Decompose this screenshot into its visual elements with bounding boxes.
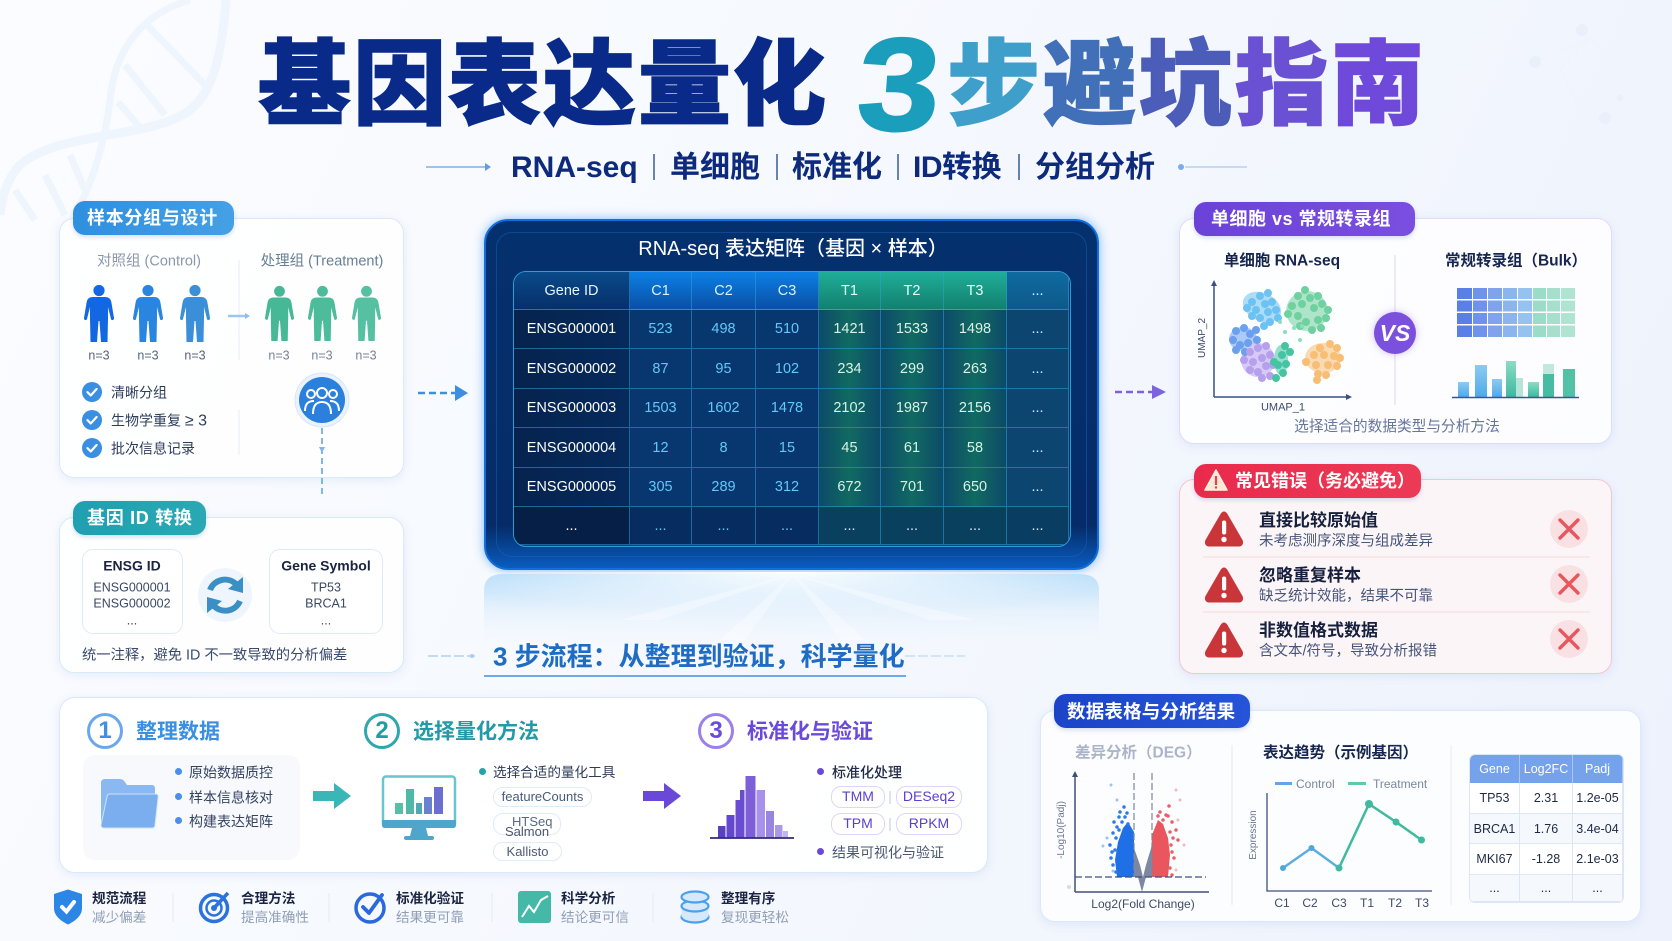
step 1 bullets: 构建表达矩阵: [189, 814, 273, 830]
expression table: 263: [963, 360, 987, 376]
step 1 bullets: 样本信息核对: [189, 789, 273, 805]
expression table: 2102: [833, 400, 866, 416]
expression table: ...: [654, 518, 667, 534]
sample count labels: n=3: [137, 348, 159, 362]
subtitle: RNA-seq: [511, 151, 638, 184]
expression table: ...: [1031, 479, 1044, 495]
expression table: ...: [565, 518, 578, 534]
results table: 3.4e-04: [1576, 822, 1619, 836]
subtitle: ID转换: [913, 151, 1001, 184]
checklist: [82, 382, 207, 458]
step 3 heading: [698, 713, 873, 749]
results table: [1469, 754, 1624, 903]
panel: gene ID conversion: [58, 501, 406, 676]
trend x labels: C1: [1274, 895, 1290, 909]
step 3 methods: RPKM: [909, 815, 949, 831]
expression table: ...: [906, 518, 918, 534]
heading: sample grouping: 样本分组与设计: [87, 208, 218, 228]
control group label: 对照组 (Control): [97, 253, 201, 269]
sample count labels: n=3: [268, 348, 290, 362]
heading: single cell vs bulk: [1194, 202, 1415, 236]
heading: data tables: 数据表格与分析结果: [1067, 701, 1235, 722]
subtitle: 分组分析: [1035, 151, 1155, 184]
heading: 3-step flow: 3 步流程：从整理到验证，科学量化: [493, 641, 905, 671]
step 3 methods: TMM: [842, 788, 874, 804]
trend legend: Treatment: [1373, 777, 1427, 791]
results table: ...: [1541, 881, 1551, 895]
step 3 methods: [817, 764, 962, 860]
step 3 methods: 标准化处理: [832, 764, 902, 780]
expression table: 1533: [896, 321, 928, 337]
results table: 1.76: [1534, 822, 1558, 836]
ENSG ID box: [82, 549, 183, 634]
treatment group people icons: [265, 286, 381, 341]
expression table: ...: [1031, 440, 1044, 456]
expression table: ...: [843, 518, 856, 534]
benefit 5: [680, 889, 798, 925]
results table: Gene: [1479, 762, 1510, 776]
trend line chart: [1262, 790, 1436, 894]
expression table: 87: [652, 360, 669, 376]
panel: data tables and analysis results: [1040, 694, 1641, 922]
sample count labels: n=3: [88, 348, 110, 362]
trend y label: Expression: [1248, 810, 1259, 860]
Gene Symbol box: [269, 549, 383, 634]
title: 步避坑指南: [947, 33, 1427, 137]
caption: 统一注释，避免 ID 不一致导致的分析偏差: [82, 647, 347, 663]
single cell title: 单细胞 RNA-seq: [1224, 252, 1340, 269]
step 3 heading: 3: [709, 717, 723, 744]
Gene Symbol box: BRCA1: [305, 596, 347, 610]
step 3 methods: DESeq2: [903, 788, 955, 804]
error item 2: 忽略重复样本: [1259, 565, 1361, 584]
trend title: 表达趋势（示例基因）: [1263, 744, 1418, 761]
icon: monitor chart: [382, 775, 456, 840]
ENSG ID box: ENSG ID: [103, 558, 161, 574]
step 2 tool list: 选择合适的量化工具: [493, 764, 615, 779]
benefit 4: 科学分析: [561, 891, 615, 906]
expression table: ...: [1031, 321, 1044, 337]
results table: Log2FC: [1524, 762, 1568, 776]
step 2 heading: 选择量化方法: [413, 720, 539, 743]
Gene Symbol box: TP53: [311, 580, 341, 594]
volcano title: 差异分析（DEG）: [1075, 744, 1202, 761]
expression table: 672: [837, 479, 862, 495]
bulk heatmap: [1457, 288, 1575, 337]
step 3 methods: 结果可视化与验证: [832, 844, 944, 860]
title: [258, 10, 1427, 158]
results table: Padj: [1585, 762, 1610, 776]
benefit 2: 合理方法: [241, 891, 295, 906]
expression table: T1: [841, 282, 858, 298]
benefit 1: [53, 889, 153, 925]
subtitle: 单细胞: [670, 151, 760, 184]
benefit 5: 复现更轻松: [721, 909, 789, 924]
step 2 tool list: HTSeq: [512, 814, 552, 829]
expression table: 312: [775, 479, 799, 495]
panel reflection glow: [484, 572, 1099, 622]
volcano plot: [1055, 770, 1215, 894]
expression table: ENSG000005: [527, 479, 616, 495]
panel: single cell vs bulk: [1178, 202, 1614, 448]
expression table: C1: [651, 282, 670, 298]
step 2 tool list: featureCounts: [502, 789, 583, 804]
step 1 bullets: 原始数据质控: [189, 764, 273, 780]
results table: 1.2e-05: [1576, 791, 1619, 805]
bulk title: 常规转录组（Bulk）: [1445, 252, 1587, 269]
panel: common errors: [1178, 464, 1614, 678]
error item 3: 含文本/符号，导致分析报错: [1259, 643, 1437, 659]
UMAP scatter plot: [1211, 280, 1352, 400]
benefit 1: 规范流程: [92, 891, 146, 906]
results table: MKI67: [1476, 852, 1513, 866]
y axis label: UMAP_2: [1197, 318, 1208, 358]
error item 2: [1204, 565, 1588, 604]
heading: common errors: [1194, 464, 1421, 498]
expression table: 299: [900, 360, 924, 376]
expression table: 510: [775, 321, 799, 337]
benefit 2: 提高准确性: [241, 909, 309, 924]
icon: folder: [100, 779, 159, 828]
matrix title: RNA-seq 表达矩阵（基因 × 样本）: [638, 238, 948, 260]
step 1 heading: [87, 713, 220, 749]
expression table: 2156: [959, 400, 991, 416]
heading: sample grouping: [73, 201, 234, 235]
expression table: 498: [711, 321, 736, 337]
volcano x label: Log2(Fold Change): [1091, 896, 1195, 910]
benefit 3: 结果更可靠: [396, 909, 464, 924]
icon: research group: [294, 372, 350, 428]
step 1 bullets: [175, 764, 273, 830]
benefit 4: 结论更可信: [561, 909, 629, 924]
expression table: 289: [711, 479, 736, 495]
expression table: T3: [967, 282, 983, 298]
results table: 2.31: [1534, 791, 1558, 805]
step 3 methods: TPM: [843, 815, 873, 831]
trend x labels: [1272, 894, 1432, 910]
results table: ...: [1489, 881, 1500, 895]
ENSG ID box: ENSG000001: [93, 580, 171, 594]
error item 3: 非数值格式数据: [1259, 621, 1378, 640]
icon: heading warning: [1204, 469, 1228, 491]
step 2 tool list: Salmon: [505, 824, 549, 839]
sample count labels: n=3: [184, 348, 206, 362]
step 2 heading: [364, 713, 539, 749]
expression table: 61: [904, 440, 920, 456]
step 1 heading: 1: [98, 717, 112, 744]
expression table: 1503: [644, 400, 677, 416]
expression table: ENSG000002: [527, 360, 616, 376]
expression table: ENSG000004: [527, 440, 616, 456]
heading: 3-step flow: [428, 641, 965, 677]
expression table: 701: [900, 479, 924, 495]
error item 3: [1204, 620, 1588, 659]
step 1 heading: 整理数据: [136, 720, 220, 743]
expression table: ...: [1031, 400, 1044, 416]
expression table: ...: [1031, 282, 1044, 298]
ENSG ID box: ...: [127, 614, 137, 628]
expression table: T2: [904, 282, 920, 298]
VS badge: [1374, 312, 1416, 354]
expression table: 305: [648, 479, 673, 495]
expression table: C3: [778, 282, 796, 298]
arrow: to single-cell comparison: [1115, 385, 1166, 399]
expression table: ...: [969, 518, 981, 534]
results table: BRCA1: [1474, 822, 1515, 836]
trend legend: Control: [1296, 777, 1335, 791]
expression table: ...: [781, 518, 793, 534]
title: 基因表达量化: [258, 33, 828, 137]
checklist: 生物学重复 ≥ 3: [111, 412, 207, 429]
heading: gene ID conversion: 基因 ID 转换: [87, 508, 193, 528]
expression table: C2: [714, 282, 733, 298]
Gene Symbol box: Gene Symbol: [281, 558, 371, 574]
bulk bar chart: [1452, 361, 1579, 398]
error item 1: 直接比较原始值: [1259, 510, 1378, 529]
icon: histogram: [710, 776, 794, 839]
expression table: 1498: [959, 321, 991, 337]
expression table: 45: [841, 440, 858, 456]
Gene Symbol box: ...: [321, 614, 331, 628]
benefit 3: [354, 889, 469, 925]
treatment group label: 处理组 (Treatment): [261, 253, 383, 269]
benefit strip: [54, 890, 789, 924]
benefit 5: 整理有序: [721, 891, 775, 906]
panel: three-step workflow: [58, 697, 990, 876]
control group people icons: [84, 285, 210, 342]
background decoration: DNA helix: [0, 0, 230, 222]
results table: ...: [1592, 881, 1603, 895]
results table: TP53: [1480, 791, 1509, 805]
expression table: 1987: [896, 400, 928, 416]
ENSG ID box: ENSG000002: [93, 596, 171, 610]
expression table: ...: [717, 518, 730, 534]
subtitle: [426, 151, 1247, 184]
expression table: ...: [1031, 518, 1044, 534]
arrow: dashed connector between group icon and ID panel: [319, 428, 325, 494]
step 2 tool list: [479, 764, 615, 861]
expression table: ...: [1031, 360, 1044, 376]
sample count labels: n=3: [311, 348, 333, 362]
heading: data tables: [1054, 694, 1250, 728]
trend x labels: T3: [1415, 895, 1429, 909]
results table: 2.1e-03: [1576, 852, 1619, 866]
checklist: 批次信息记录: [111, 440, 195, 456]
benefit 1: 减少偏差: [92, 909, 146, 924]
arrow: to expression matrix: [418, 385, 468, 401]
background decoration: faint molecule: [1530, 57, 1540, 68]
expression table: 102: [775, 360, 799, 376]
expression table: [513, 271, 1071, 547]
sample count labels: [88, 348, 377, 362]
benefit 4: [518, 889, 633, 925]
heading: single cell vs bulk: 单细胞 vs 常规转录组: [1211, 209, 1391, 229]
trend x labels: C3: [1331, 895, 1347, 909]
icon: sync arrows: [198, 568, 252, 622]
error item 1: [1204, 510, 1588, 549]
benefit 3: 标准化验证: [396, 891, 464, 906]
sample count labels: n=3: [355, 348, 377, 362]
arrow: step 2 to step 3: [643, 783, 681, 809]
expression table: 95: [715, 360, 732, 376]
expression table: ENSG000001: [527, 321, 616, 337]
error item 1: 未考虑测序深度与组成差异: [1259, 533, 1433, 549]
expression table: 234: [837, 360, 862, 376]
expression table: 1421: [833, 321, 866, 337]
expression table: 15: [779, 440, 795, 456]
trend legend: [1275, 775, 1430, 791]
expression table: 12: [652, 440, 669, 456]
panel: RNA-seq expression matrix: [477, 212, 1106, 574]
subtitle: 标准化: [792, 151, 882, 184]
VS badge: VS: [1380, 320, 1410, 346]
heading: gene ID conversion: [73, 501, 206, 535]
results table: -1.28: [1532, 852, 1560, 866]
expression table: ENSG000003: [527, 400, 616, 416]
caption: 选择适合的数据类型与分析方法: [1294, 419, 1500, 435]
trend x labels: T1: [1360, 895, 1374, 909]
step 2 heading: 2: [375, 717, 389, 744]
expression table: 1602: [707, 400, 740, 416]
expression table: 1478: [771, 400, 803, 416]
heading: common errors: 常见错误（务必避免）: [1235, 471, 1415, 491]
benefit 2: [198, 889, 313, 925]
error item 2: 缺乏统计效能，结果不可靠: [1259, 588, 1433, 604]
expression table: 650: [963, 479, 987, 495]
expression table: 523: [648, 321, 673, 337]
arrow: step 1 to step 2: [313, 783, 351, 809]
expression table: 58: [967, 440, 983, 456]
panel: sample grouping and design: [58, 201, 406, 482]
x axis label: UMAP_1: [1261, 401, 1305, 413]
volcano y label: -Log10(Padj): [1056, 801, 1067, 859]
checklist: 清晰分组: [111, 384, 167, 400]
trend x labels: T2: [1388, 895, 1402, 909]
expression table: Gene ID: [544, 282, 598, 298]
trend x labels: C2: [1302, 895, 1318, 909]
expression table: 8: [719, 440, 728, 456]
step 3 heading: 标准化与验证: [747, 720, 873, 743]
step 2 tool list: Kallisto: [507, 844, 548, 859]
title: 3: [853, 10, 945, 158]
